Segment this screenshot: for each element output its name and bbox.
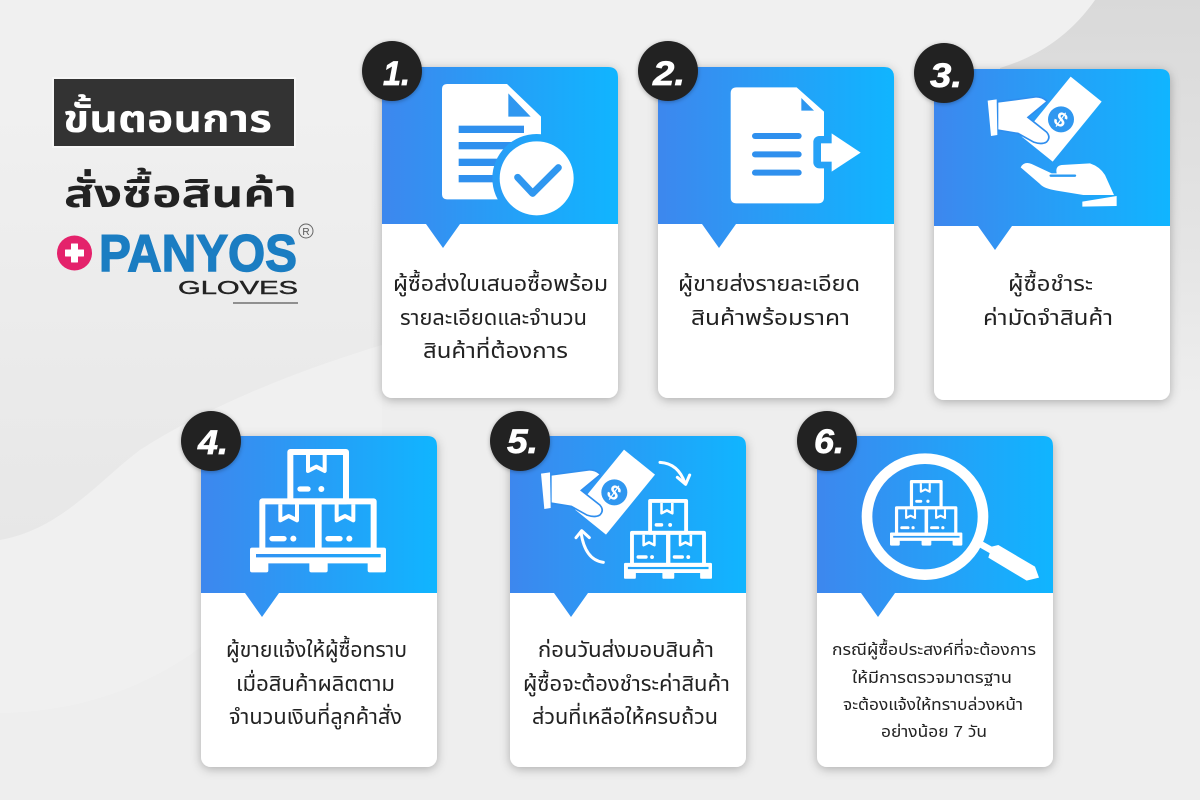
badge 1 <box>362 41 422 101</box>
badge 4 <box>181 411 241 471</box>
step 5 description <box>523 638 730 729</box>
card 6 body <box>817 436 1053 767</box>
icon: money for goods exchange <box>541 450 712 579</box>
step 2 description: สินค้าพร้อมราคา <box>691 306 850 330</box>
card 6 header <box>817 436 1053 617</box>
panel: step 1 <box>362 41 618 398</box>
step 1 description <box>393 269 608 363</box>
panel: step 6 <box>797 411 1053 767</box>
subtitle: order goods: สั่งซื้อสินค้า <box>64 167 297 216</box>
step 4 description: จำนวนเงินที่ลูกค้าสั่ง <box>229 702 402 730</box>
panel: step 5 <box>490 411 746 767</box>
step 6 description: อย่างน้อย 7 วัน <box>881 723 987 741</box>
logo: Panyos Gloves: PANYOS <box>99 225 297 283</box>
step 1 description: ผู้ซื้อส่งใบเสนอซื้อพร้อม <box>393 269 608 297</box>
card 1 body <box>382 67 618 398</box>
step 6 description: จะต้องแจ้งให้ทราบล่วงหน้า <box>843 696 1023 714</box>
icon: document with arrow <box>731 87 861 203</box>
card 5 header <box>510 436 746 617</box>
step 4 description: ผู้ขายแจ้งให้ผู้ซื้อทราบ <box>226 635 407 663</box>
badge 5 <box>490 411 550 471</box>
badge 3 <box>914 43 974 103</box>
step 5 description: ก่อนวันส่งมอบสินค้า <box>538 638 714 662</box>
step 6 description <box>832 638 1036 741</box>
badge 3: 3. <box>930 57 962 95</box>
panel: step 3 <box>914 43 1170 400</box>
card 1 header <box>382 67 618 248</box>
logo: Panyos Gloves: GLOVES <box>178 278 298 298</box>
step 2 description: ผู้ขายส่งรายละเอียด <box>678 272 860 297</box>
step 3 description: ค่ามัดจำสินค้า <box>983 306 1113 330</box>
step 4 description: เมื่อสินค้าผลิตตาม <box>236 669 395 696</box>
logo: Panyos Gloves: R <box>302 227 310 238</box>
step 5 description: ส่วนที่เหลือให้ครบถ้วน <box>532 702 718 729</box>
title: process heading: ขั้นตอนการ <box>63 93 272 141</box>
step 1 description: รายละเอียดและจำนวน <box>400 307 587 330</box>
panel: step 4 <box>181 411 437 767</box>
step 3 description: ผู้ซื้อชำระ <box>1008 269 1093 297</box>
badge 5: 5. <box>507 423 538 461</box>
card 3 body <box>934 69 1170 400</box>
step 1 description: สินค้าที่ต้องการ <box>423 336 568 363</box>
card 4 header <box>201 436 437 617</box>
card 2 header <box>658 67 894 248</box>
panel: step 2 <box>638 41 894 398</box>
badge 4: 4. <box>197 424 228 462</box>
card 3 header <box>934 69 1170 250</box>
badge 2: 2. <box>652 55 685 93</box>
step 2 description <box>678 272 860 330</box>
logo: Panyos Gloves <box>57 224 313 303</box>
step 3 description <box>983 269 1113 330</box>
icon: hands exchanging money <box>988 77 1117 207</box>
icon: magnifier over boxes <box>867 459 1039 581</box>
card 5 body <box>510 436 746 767</box>
card 2 body <box>658 67 894 398</box>
badge 6 <box>797 411 857 471</box>
icon: boxes on pallet <box>250 452 386 572</box>
step 6 description: ให้มีการตรวจมาตรฐาน <box>852 670 1012 687</box>
title: process heading <box>52 77 296 148</box>
badge 6: 6. <box>814 423 844 461</box>
card 4 body <box>201 436 437 767</box>
icon: document with check <box>442 84 574 215</box>
step 6 description: กรณีผู้ซื้อประสงค์ที่จะต้องการ <box>832 638 1036 659</box>
step 4 description <box>226 635 407 730</box>
badge 2 <box>638 41 698 101</box>
badge 1: 1. <box>383 55 410 93</box>
step 5 description: ผู้ซื้อจะต้องชำระค่าสินค้า <box>523 669 730 697</box>
